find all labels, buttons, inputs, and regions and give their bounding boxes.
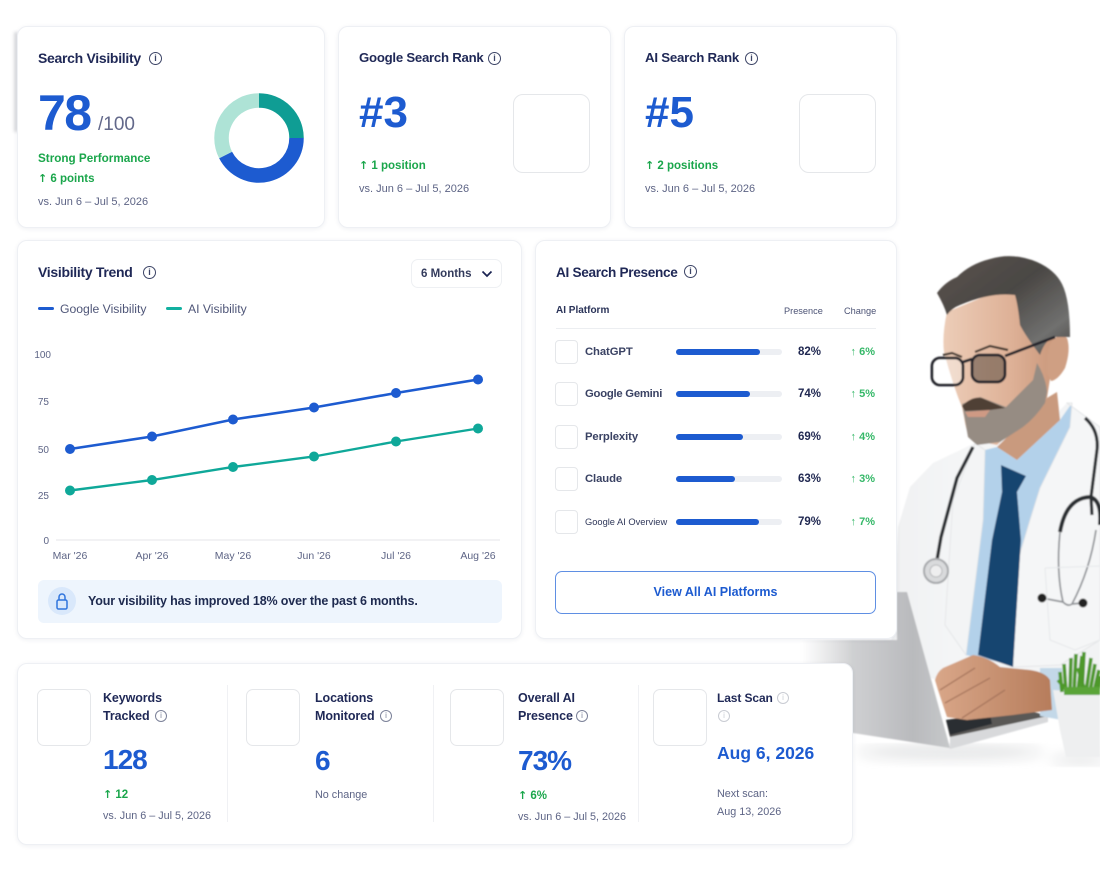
icon: info <box>143 266 156 279</box>
brows <box>943 346 1008 357</box>
row: chatgpt <box>555 340 875 364</box>
icon: info <box>149 52 162 65</box>
metric: locations monitored: No change <box>315 789 367 801</box>
comparison period: vs. Jun 6 – Jul 5, 2026 <box>645 183 755 195</box>
heading: google search rank: Google Search Rank <box>359 50 483 65</box>
metric: overall ai presence: vs. Jun 6 – Jul 5, 2026 <box>518 811 626 823</box>
change: position: ↑ 1 position <box>359 159 426 172</box>
metric: locations monitored: Monitored <box>315 709 375 723</box>
panel: visibility trend <box>17 240 522 639</box>
metric: locations monitored: i <box>385 711 387 720</box>
divider lines <box>227 685 639 822</box>
icon: info <box>488 52 501 65</box>
ear <box>1047 336 1069 381</box>
row: claude: Claude <box>585 473 622 485</box>
metric: keywords tracked: vs. Jun 6 – Jul 5, 2026 <box>103 810 211 822</box>
panel: ai search presence <box>535 240 897 639</box>
donut chart <box>214 93 304 183</box>
score value: 78 <box>38 85 91 141</box>
button: view all ai platforms: View All AI Platforms <box>654 585 777 599</box>
heading: ai search rank: AI Search Rank <box>645 50 739 65</box>
plant <box>1058 652 1100 692</box>
row: google gemini: 74% <box>798 388 821 400</box>
metric: overall ai presence: ↑ 6% <box>518 789 547 802</box>
metric: overall ai presence: 73% <box>518 745 571 776</box>
legend: ai visibility: AI Visibility <box>188 302 247 316</box>
metric: overall ai presence: Presence <box>518 709 573 723</box>
row: chatgpt: ChatGPT <box>585 346 633 358</box>
row: google gemini <box>555 382 875 406</box>
hair <box>937 256 1070 355</box>
icon: info: i <box>750 53 753 63</box>
line chart: visibility trend: 75 <box>38 397 49 408</box>
dropdown: 6 months: 6 Months <box>421 268 471 280</box>
line chart: visibility trend: Apr '26 <box>136 550 169 562</box>
heading: visibility trend: Visibility Trend <box>38 264 133 280</box>
glasses <box>932 337 1055 385</box>
change: positions: ↑ 2 positions <box>645 159 718 172</box>
icon: info <box>745 52 758 65</box>
row: google ai overview: 79% <box>798 516 821 528</box>
metric: keywords tracked: Tracked <box>103 709 150 723</box>
metric: overall ai presence: Overall AI <box>518 691 575 705</box>
table header <box>556 304 876 329</box>
row: google gemini: Google Gemini <box>585 388 662 400</box>
coat lapels <box>1013 403 1100 667</box>
icon: info: i <box>689 266 692 276</box>
button: view all ai platforms <box>555 571 876 614</box>
stethoscope <box>924 418 1100 608</box>
metric: last scan: Aug 6, 2026 <box>717 743 814 763</box>
face <box>943 290 1056 445</box>
metric: last scan: Aug 13, 2026 <box>717 806 781 818</box>
laptop base <box>950 716 1048 749</box>
icon: info: i <box>154 53 157 63</box>
coat pocket <box>1045 566 1100 650</box>
row: google gemini: ↑ 5% <box>851 388 875 400</box>
metric: last scan: i <box>723 711 725 720</box>
change: points: ↑ 6 points <box>38 172 94 185</box>
icon: info: i <box>493 53 496 63</box>
line chart: visibility trend <box>34 350 500 562</box>
line chart: visibility trend: 0 <box>43 536 49 547</box>
metric: locations monitored <box>246 689 392 801</box>
legend: google visibility: Google Visibility <box>60 302 146 316</box>
comparison period: vs. Jun 6 – Jul 5, 2026 <box>38 196 148 208</box>
table header: Change <box>844 306 876 316</box>
plant pot <box>1053 690 1100 757</box>
dropdown: 6 months <box>411 259 502 288</box>
row: chatgpt: ↑ 6% <box>851 346 875 358</box>
laptop lid <box>800 592 950 748</box>
heading: ai search presence: AI Search Presence <box>556 265 678 280</box>
panel: ai search rank <box>624 26 897 228</box>
performance label: Strong Performance <box>38 152 150 165</box>
lab coat <box>890 403 1100 700</box>
comparison period: vs. Jun 6 – Jul 5, 2026 <box>359 183 469 195</box>
callout text: Your visibility has improved 18% over the past 6 months. <box>88 594 418 608</box>
row: perplexity: ↑ 4% <box>851 431 875 443</box>
table header: AI Platform <box>556 305 609 316</box>
row: perplexity: 69% <box>798 431 821 443</box>
metric: keywords tracked <box>37 689 211 822</box>
icon placeholder <box>799 94 876 173</box>
metric: locations monitored: Locations <box>315 691 373 705</box>
row: claude <box>555 467 875 491</box>
row: google ai overview: Google AI Overview <box>585 517 667 527</box>
metric: last scan <box>653 689 814 818</box>
icon placeholder <box>513 94 590 173</box>
metric: keywords tracked: i <box>160 711 162 720</box>
line chart: visibility trend: Aug '26 <box>460 550 496 562</box>
panel: google search rank <box>338 26 611 228</box>
metric: last scan: Next scan: <box>717 788 768 800</box>
metric: last scan: i <box>782 693 784 702</box>
icon: lock <box>48 587 76 615</box>
line chart: visibility trend: Mar '26 <box>53 550 88 562</box>
row: google ai overview <box>555 510 875 534</box>
row: claude: ↑ 3% <box>851 473 875 485</box>
table header: Presence <box>784 306 823 316</box>
rank value: #3 <box>359 88 408 137</box>
metric: overall ai presence <box>450 689 626 823</box>
metric: keywords tracked: Keywords <box>103 691 162 705</box>
metric: overall ai presence: i <box>581 711 583 720</box>
row: claude: 63% <box>798 473 821 485</box>
shirt <box>966 403 1072 665</box>
metric: keywords tracked: 128 <box>103 744 147 775</box>
row: perplexity <box>555 425 875 449</box>
line chart: visibility trend: Jul '26 <box>381 550 411 562</box>
line chart: visibility trend: Jun '26 <box>297 550 331 562</box>
panel: search visibility <box>17 26 325 228</box>
sleeve cuff <box>1040 668 1062 720</box>
score maximum: /100 <box>98 114 135 135</box>
row: chatgpt: 82% <box>798 346 821 358</box>
callout: visibility improvement <box>38 580 502 623</box>
hand <box>935 655 1052 720</box>
heading: search visibility: Search Visibility <box>38 50 141 66</box>
line chart: visibility trend: 50 <box>38 445 49 456</box>
line chart: visibility trend: 25 <box>38 491 49 502</box>
row: google ai overview: ↑ 7% <box>851 516 875 528</box>
row: perplexity: Perplexity <box>585 431 638 443</box>
rank value: #5 <box>645 88 694 137</box>
icon: info: i <box>148 267 151 277</box>
metric: last scan: Last Scan <box>717 691 773 705</box>
line chart: visibility trend: 100 <box>34 350 51 361</box>
metric: locations monitored: 6 <box>315 745 331 776</box>
line chart: visibility trend: May '26 <box>215 550 251 562</box>
neck <box>997 392 1060 460</box>
icon: info <box>684 265 697 278</box>
tie <box>978 465 1026 667</box>
desk shadow <box>855 745 1100 765</box>
panel: summary metrics <box>17 663 853 845</box>
stray shadow beside first card <box>14 32 18 132</box>
metric: keywords tracked: ↑ 12 <box>103 788 128 801</box>
beard <box>962 363 1047 445</box>
